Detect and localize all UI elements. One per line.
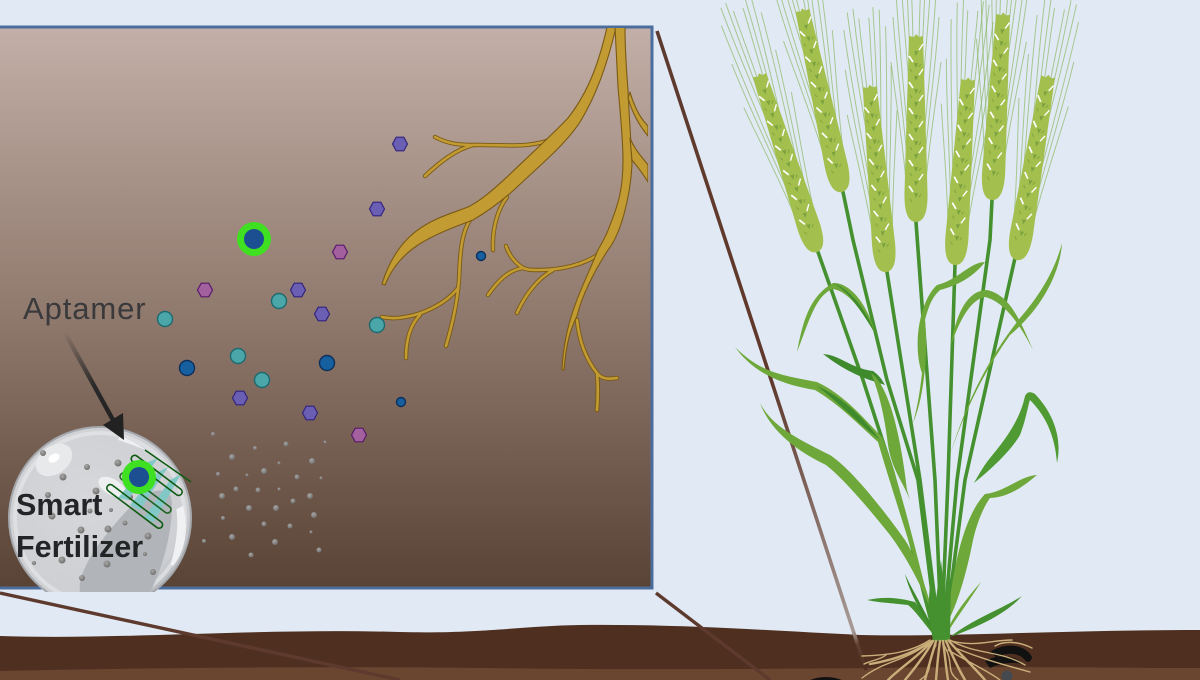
- aptamer label: Aptamer: [23, 291, 146, 326]
- wheat heads: [711, 0, 1086, 274]
- arrow: aptamer to sphere: [65, 333, 124, 440]
- zoom lead lines: [0, 31, 866, 680]
- rhizosphere roots of plant: [810, 640, 1032, 680]
- ground soil: [0, 625, 1200, 680]
- wheat plant: [711, 0, 1086, 641]
- target molecule bound by green ring: [237, 222, 271, 256]
- fertilizer granules inside sphere: [32, 450, 156, 581]
- label: smart fertilizer: Smart: [16, 488, 102, 522]
- nutrient particles: [158, 137, 486, 442]
- label: smart fertilizer: Fertilizer: [16, 530, 143, 564]
- released fertilizer granules: [202, 432, 326, 558]
- smart fertilizer sphere: [9, 427, 191, 609]
- roots: [382, 27, 648, 410]
- aptamer on sphere: [105, 450, 191, 530]
- leaves: [735, 243, 1062, 641]
- soil magnified panel: [0, 27, 652, 588]
- stems: [818, 192, 1015, 625]
